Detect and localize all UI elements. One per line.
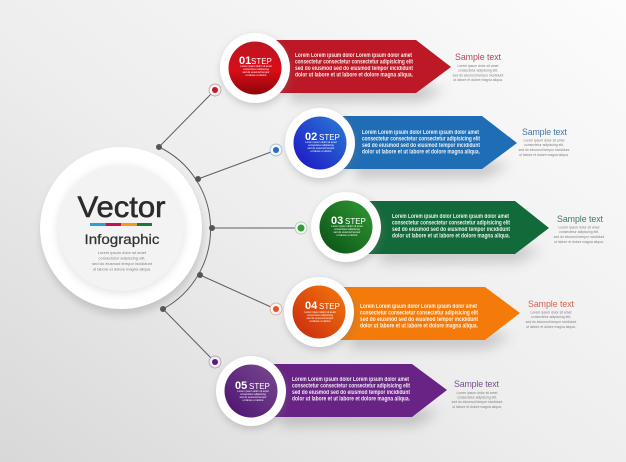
badge 4: Lorem ipsum dolor sit amet [304, 310, 336, 314]
side text 5: Lorem ipsum dolor sit amet [457, 391, 497, 395]
arrow 5 text: consectetur consectetur consectetur adipisicing elit [292, 384, 410, 390]
side text 5: sed do eiusmod tempor incididunt [452, 400, 502, 404]
hub colour rule [90, 223, 152, 226]
connector network [156, 93, 296, 359]
arrow 5 text: sed do eiusmod sed do eiusmod tempor incididunt [292, 390, 410, 396]
side text 5: Sample text [454, 379, 500, 389]
badge 2: consectetur adipiscing [308, 143, 334, 147]
badge 4 [284, 277, 355, 350]
arrow 2 text: sed do eiusmod sed do eiusmod tempor incididunt [362, 143, 480, 149]
arrow 4 text [360, 304, 478, 330]
badge 5: sed do eiusmod tempor [239, 395, 267, 399]
badge 2 [285, 108, 356, 181]
arrow 4 text: dolor ut labore et ut labore et dolore magna aliqua. [360, 324, 478, 330]
side text 4: Lorem ipsum dolor sit amet [531, 310, 571, 314]
badge 3: ut labore et dolore [337, 233, 358, 237]
node 5 [209, 356, 221, 368]
side text 3 [554, 214, 604, 244]
badge 2: sed do eiusmod tempor [307, 146, 335, 150]
step 3 row [295, 192, 604, 265]
badge 1: 01 [239, 55, 251, 67]
arrow 5 text: Lorem Lorem ipsum dolor Lorem ipsum dolor amet [292, 377, 409, 383]
badge 5: 05 [235, 380, 247, 392]
side text 2: consectetur adipiscing elit, [524, 143, 564, 147]
side text 5 [452, 379, 502, 409]
side text 3: sed do eiusmod tempor incididunt [554, 235, 604, 239]
badge 1: sed do eiusmod tempor [242, 70, 270, 74]
badge 1 [220, 33, 291, 106]
arrow 2 text [362, 130, 480, 156]
badge 3: Lorem ipsum dolor sit amet [331, 224, 363, 228]
badge 1: STEP [251, 57, 272, 66]
badge 1: ut labore et dolore [246, 73, 267, 77]
arrow 4 [335, 287, 520, 340]
arrow 2 [335, 116, 517, 169]
node 3 [295, 222, 307, 234]
arrow 1 text [295, 53, 413, 78]
node 1 [209, 84, 221, 96]
badge 5: consectetur adipiscing [240, 392, 266, 396]
hub subtitle: Infographic [84, 232, 160, 247]
side text 2: ut labore et dolore magna aliqua. [519, 153, 569, 157]
side text 1: Sample text [455, 52, 502, 62]
badge 5: STEP [249, 382, 270, 391]
side text 4: Sample text [528, 299, 575, 309]
node 4 [270, 303, 282, 315]
arrow 3 text [392, 214, 510, 240]
badge 3: 03 [331, 215, 343, 227]
arrow 2 shadow [355, 160, 510, 178]
arrow 4 shadow [350, 331, 512, 349]
side text 3: Sample text [557, 214, 604, 224]
arrow 4 text: consectetur consectetur consectetur adipisicing elit [360, 310, 478, 316]
badge 3: STEP [345, 217, 366, 226]
hub body text: consectetur adipiscing elit, [99, 256, 145, 260]
badge 1: consectetur adipiscing [243, 67, 269, 71]
arrow 5 text [292, 377, 410, 402]
side text 1: sed do eiusmod tempor incididunt [453, 74, 503, 78]
badge 3 [311, 192, 383, 265]
side text 4: consectetur adipiscing elit, [531, 315, 571, 319]
node 2 [270, 144, 282, 156]
arrow 1 text: sed do eiusmod sed do eiusmod tempor incididunt [295, 66, 413, 72]
badge 1: Lorem ipsum dolor sit amet [240, 64, 272, 68]
side text 5: ut labore et dolore magna aliqua. [452, 405, 502, 409]
hub title: Vector [78, 191, 166, 224]
arrow 5 shadow [280, 408, 440, 426]
arrow 4 text: Lorem Lorem ipsum dolor Lorem ipsum dolor amet [360, 304, 477, 310]
arrow 2 text: dolor ut labore et ut labore et dolore magna aliqua. [362, 150, 480, 156]
badge 3: sed do eiusmod tempor [333, 230, 361, 234]
arrow 1 text: Lorem Lorem ipsum dolor Lorem ipsum dolor amet [295, 53, 412, 59]
arrow 1 text: consectetur consectetur consectetur adipisicing elit [295, 60, 413, 66]
side text 2: Sample text [522, 127, 568, 137]
side text 3: ut labore et dolore magna aliqua. [554, 240, 604, 244]
side text 1 [453, 52, 503, 82]
side text 2 [519, 127, 569, 157]
step 4 row [270, 277, 576, 350]
side text 2: sed do eiusmod tempor incididunt [519, 148, 569, 152]
hub body text [92, 250, 153, 272]
arrow 2 text: Lorem Lorem ipsum dolor Lorem ipsum dolor amet [362, 130, 479, 136]
side text 1: consectetur adipiscing elit, [458, 68, 498, 72]
arrow 5 text: dolor ut labore et ut labore et dolore magna aliqua. [292, 396, 410, 402]
arrow 4 text: sed do eiusmod sed do eiusmod tempor incididunt [360, 317, 478, 323]
side text 4 [526, 299, 576, 329]
badge 4: 04 [305, 300, 318, 312]
badge 3: consectetur adipiscing [334, 227, 360, 231]
badge 2: ut labore et dolore [311, 149, 332, 153]
badge 4: sed do eiusmod tempor [306, 316, 334, 320]
side text 4: ut labore et dolore magna aliqua. [526, 325, 576, 329]
side text 3: Lorem ipsum dolor sit amet [559, 226, 599, 230]
arrow 1 shadow [290, 84, 445, 102]
step 1 row [209, 33, 503, 106]
side text 2: Lorem ipsum dolor sit amet [524, 138, 564, 142]
badge 5 [216, 356, 287, 429]
badge 2: Lorem ipsum dolor sit amet [305, 140, 337, 144]
hub body text: ut labore et dolore magna aliqua. [93, 266, 151, 272]
arrow 2 text: consectetur consectetur consectetur adipisicing elit [362, 136, 480, 142]
hub body text: sed do eiusmod tempor incididunt [92, 261, 153, 266]
arrow 3 shadow [380, 245, 542, 263]
badge 4: consectetur adipiscing [307, 313, 333, 317]
step 5 row [209, 356, 502, 429]
side text 1: ut labore et dolore magna aliqua. [453, 78, 503, 82]
arrow 5 [265, 364, 447, 417]
arrow 1 text: dolor ut labore et ut labore et dolore magna aliqua. [295, 72, 413, 78]
arrow 1 [270, 40, 451, 93]
arrow 3 [362, 201, 549, 254]
badge 4: ut labore et dolore [310, 319, 331, 323]
badge 2: 02 [305, 131, 317, 143]
side text 4: sed do eiusmod tempor incididunt [526, 320, 576, 324]
badge 2: STEP [319, 133, 340, 142]
side text 1: Lorem ipsum dolor sit amet [458, 64, 498, 68]
arrow 3 text: consectetur consectetur consectetur adipisicing elit [392, 220, 510, 226]
badge 5: Lorem ipsum dolor sit amet [237, 389, 269, 393]
badge 5: ut labore et dolore [243, 398, 264, 402]
side text 3: consectetur adipiscing elit, [559, 230, 599, 234]
hub circle [40, 147, 203, 315]
arrow 3 text: Lorem Lorem ipsum dolor Lorem ipsum dolor amet [392, 214, 509, 220]
hub body text: Lorem ipsum dolor sit amet [98, 250, 147, 255]
side text 5: consectetur adipiscing elit, [457, 396, 497, 400]
arrow 3 text: sed do eiusmod sed do eiusmod tempor incididunt [392, 227, 510, 233]
arrow 3 text: dolor ut labore et ut labore et dolore magna aliqua. [392, 234, 510, 240]
step 2 row [270, 108, 569, 181]
badge 4: STEP [319, 302, 340, 311]
